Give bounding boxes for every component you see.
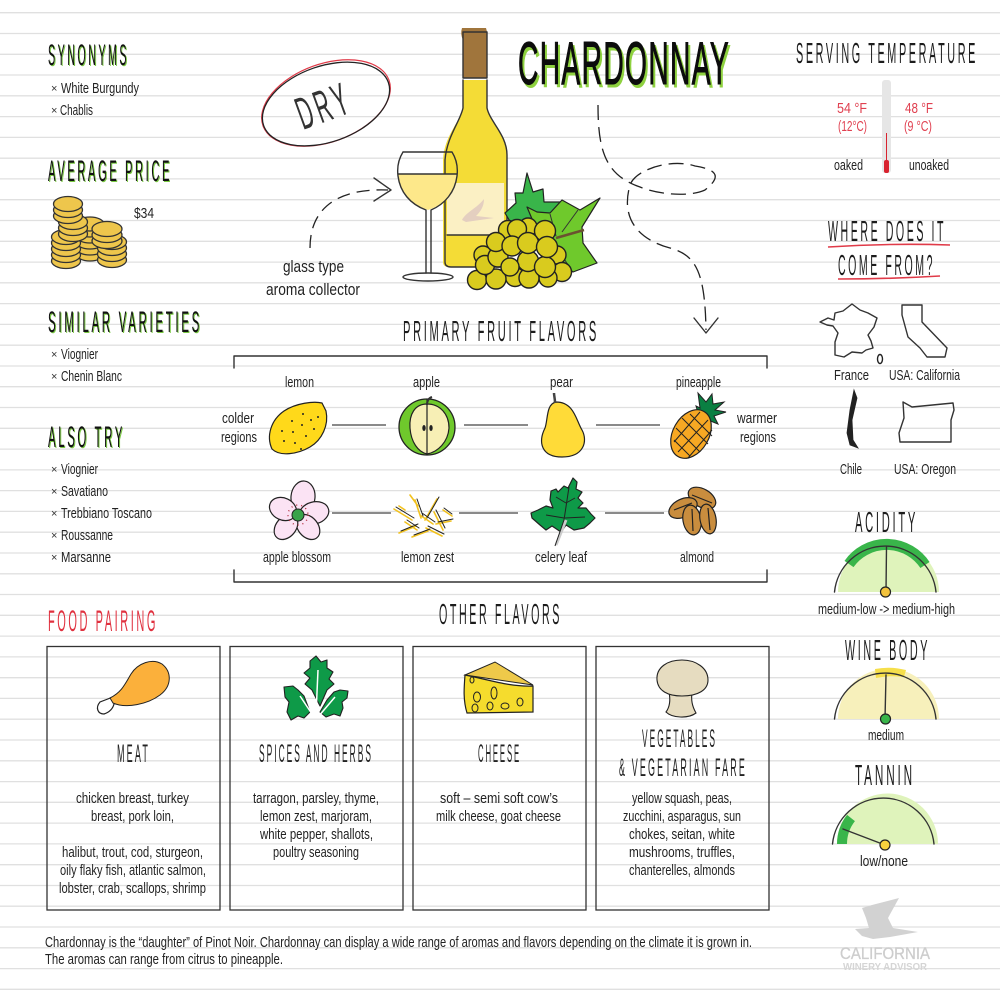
panel: vegetables: VEGETABLES [642, 725, 717, 753]
flavor: lemon [269, 374, 327, 454]
text: meat pairing: lobster, crab, scallops, shrimp [59, 880, 206, 897]
dry badge: DRY [289, 71, 359, 139]
labels: other flavors: celery leaf [535, 549, 588, 566]
flavor: pineapple [662, 374, 726, 466]
panel: vegetables [596, 646, 769, 910]
list: also try: × [51, 530, 57, 542]
gauge label: tannin: low/none [860, 853, 908, 870]
flavor: almond [666, 483, 719, 536]
footer note [45, 934, 752, 968]
map: Chile [840, 390, 862, 478]
logo: California Winery Advisor [840, 898, 931, 973]
text: meat pairing: halibut, trout, cod, sturgeon, [62, 844, 203, 861]
label: warmer regions [736, 410, 777, 446]
dry badge [250, 43, 402, 163]
connector [464, 424, 528, 426]
list: synonyms: × [51, 105, 57, 117]
label: colder regions: regions [221, 429, 257, 446]
temperature: unoaked: 48 °F [905, 100, 933, 117]
label: warmer regions: regions [740, 429, 776, 446]
text: & VEGETARIAN FARE [619, 754, 747, 782]
text: herbs pairing: poultry seasoning [273, 844, 359, 861]
flavor bracket top [234, 356, 767, 368]
label: colder regions [221, 410, 257, 446]
list: also try: Marsanne [61, 549, 111, 566]
text: vegetables pairing: mushrooms, truffles, [629, 844, 735, 861]
temperature: unoaked: unoaked [909, 157, 949, 174]
list: similar varieties: Viognier [61, 346, 98, 363]
illustration: grapes and leaves [468, 173, 600, 290]
panel: average price [48, 155, 172, 268]
panel: tannin [832, 760, 938, 870]
panel: similar varieties [48, 306, 202, 385]
temperature: oaked: oaked [834, 157, 863, 174]
flavor bracket bottom [234, 570, 767, 582]
panel: acidity [818, 507, 955, 618]
text: vegetables pairing: zucchini, asparagus, sun [623, 808, 741, 825]
map: California [889, 305, 960, 384]
icon: parsley [284, 656, 348, 720]
connector [605, 512, 664, 514]
text: CHARDONNAY [518, 30, 730, 97]
heading: where does it come from [828, 216, 950, 282]
text: AVERAGE PRICE [48, 155, 172, 188]
list: also try: Roussanne [61, 527, 113, 544]
labels: other flavors [263, 549, 714, 566]
text: OTHER FLAVORS [439, 599, 562, 631]
text: SIMILAR VARIETIES [48, 306, 202, 339]
text: meat pairing: oily flaky fish, atlantic salmon, [60, 862, 206, 879]
text: SYNONYMS [48, 39, 129, 72]
icon: chicken leg [97, 661, 169, 714]
text: cheese pairing: milk cheese, goat cheese [436, 808, 561, 825]
panel: synonyms [48, 39, 139, 119]
text: meat pairing: breast, pork loin, [91, 808, 174, 825]
list: also try: × [51, 552, 57, 564]
footer note: The aromas can range from citrus to pineapple. [45, 951, 283, 968]
text: vegetables pairing: yellow squash, peas, [632, 790, 732, 807]
panel: where does it come from [820, 216, 960, 478]
labels: other flavors: apple blossom [263, 549, 331, 566]
list: also try: Trebbiano Toscano [61, 505, 152, 522]
panel: cheese [413, 646, 586, 910]
text: PRIMARY FRUIT FLAVORS [403, 316, 599, 348]
flavor: apple blossom [266, 480, 331, 544]
glass type label [266, 257, 360, 299]
connector [332, 424, 386, 426]
map: Oregon [894, 402, 956, 478]
list: also try: × [51, 486, 57, 498]
panel: serving temperature [796, 38, 978, 174]
panel: meat [47, 646, 220, 910]
gauge: tannin [832, 794, 938, 850]
panel: also try [48, 421, 152, 566]
panel: wine body [834, 635, 939, 744]
text: meat pairing: chicken breast, turkey [76, 790, 189, 807]
text: vegetables pairing: chanterelles, almonds [629, 862, 735, 879]
panel: meat: MEAT [117, 740, 150, 768]
heading: vegetables [619, 725, 747, 782]
text: herbs pairing: white pepper, shallots, [259, 826, 373, 843]
list: also try: × [51, 508, 57, 520]
flavor: pear: pear [550, 374, 573, 391]
flavor: celery leaf [531, 478, 595, 546]
text: SPICES AND HERBS [259, 740, 373, 768]
flavor: lemon: lemon [285, 374, 314, 391]
arrow: to glass [310, 178, 391, 248]
flavor: pear [542, 374, 585, 457]
temperature: oaked: (12°C) [838, 118, 867, 135]
map: Chile: Chile [840, 461, 862, 478]
gauge label: wine body: medium [868, 727, 904, 744]
list: similar varieties: × [51, 371, 57, 383]
text: cheese pairing [436, 790, 561, 825]
arrow: loop to fruit flavors [598, 105, 718, 333]
connector [459, 512, 518, 514]
list: synonyms: Chablis [60, 102, 93, 119]
icon: coin stacks [52, 196, 126, 268]
map: California: USA: California [889, 367, 960, 384]
panel: cheese: CHEESE [478, 740, 521, 768]
map: France [820, 304, 882, 384]
icon: mushroom [657, 660, 708, 717]
text: cheese pairing: soft – semi soft cow’s [440, 790, 558, 807]
icon: cheese wedge [464, 662, 533, 713]
temperature: oaked: 54 °F [837, 100, 867, 117]
gauge: acidity [834, 541, 939, 597]
temperature: unoaked: (9 °C) [904, 118, 932, 135]
temperature: oaked [834, 100, 867, 174]
flavor: apple [399, 374, 455, 455]
list: synonyms [51, 80, 139, 119]
text: FOOD PAIRING [48, 605, 158, 638]
logo: California Winery Advisor: WINERY ADVISOR [843, 962, 928, 973]
gauge: wine body [834, 668, 939, 724]
map: Oregon: USA: Oregon [894, 461, 956, 478]
text: vegetables pairing: chokes, seitan, white [629, 826, 735, 843]
price value: $34 [134, 205, 154, 222]
label: warmer regions: warmer [736, 410, 777, 427]
list: synonyms: × [51, 83, 57, 95]
footer note: Chardonnay is the “daughter” of Pinot Noir. Chardonnay can display a wide range of aromas and flavors depending on the climate it is grown in. [45, 934, 752, 951]
text: vegetables pairing [623, 790, 741, 879]
glass type label: glass type [283, 257, 344, 276]
connector [332, 512, 391, 514]
list: similar varieties: Chenin Blanc [61, 368, 122, 385]
label: colder regions: colder [222, 410, 254, 427]
temperature: unoaked [904, 100, 949, 174]
text: herbs pairing: lemon zest, marjoram, [260, 808, 372, 825]
icon: thermometer [882, 80, 891, 173]
panel: spices and herbs [230, 646, 403, 910]
illustration: wine glass [398, 152, 457, 281]
labels: other flavors: almond [680, 549, 714, 566]
text: herbs pairing: tarragon, parsley, thyme, [253, 790, 379, 807]
panel: also try: ALSO TRY [48, 421, 125, 454]
list: similar varieties: × [51, 349, 57, 361]
list: similar varieties [51, 346, 122, 385]
logo: California Winery Advisor: CALIFORNIA [840, 944, 931, 963]
list: also try: × [51, 464, 57, 476]
panel: tannin: TANNIN [855, 760, 915, 792]
map: France: France [834, 367, 869, 384]
list: also try: Viognier [61, 461, 98, 478]
list: also try [51, 461, 152, 566]
flavor: lemon zest [394, 495, 453, 537]
list: synonyms: White Burgundy [61, 80, 139, 97]
text: meat pairing [59, 790, 206, 897]
labels: other flavors: lemon zest [401, 549, 455, 566]
text: herbs pairing [253, 790, 379, 861]
connector [596, 424, 660, 426]
illustration: wine bottle [443, 28, 507, 267]
list: also try: Savatiano [61, 483, 108, 500]
flavor: pineapple: pineapple [676, 374, 721, 391]
flavor: apple: apple [413, 374, 440, 391]
glass type label: aroma collector [266, 280, 360, 299]
